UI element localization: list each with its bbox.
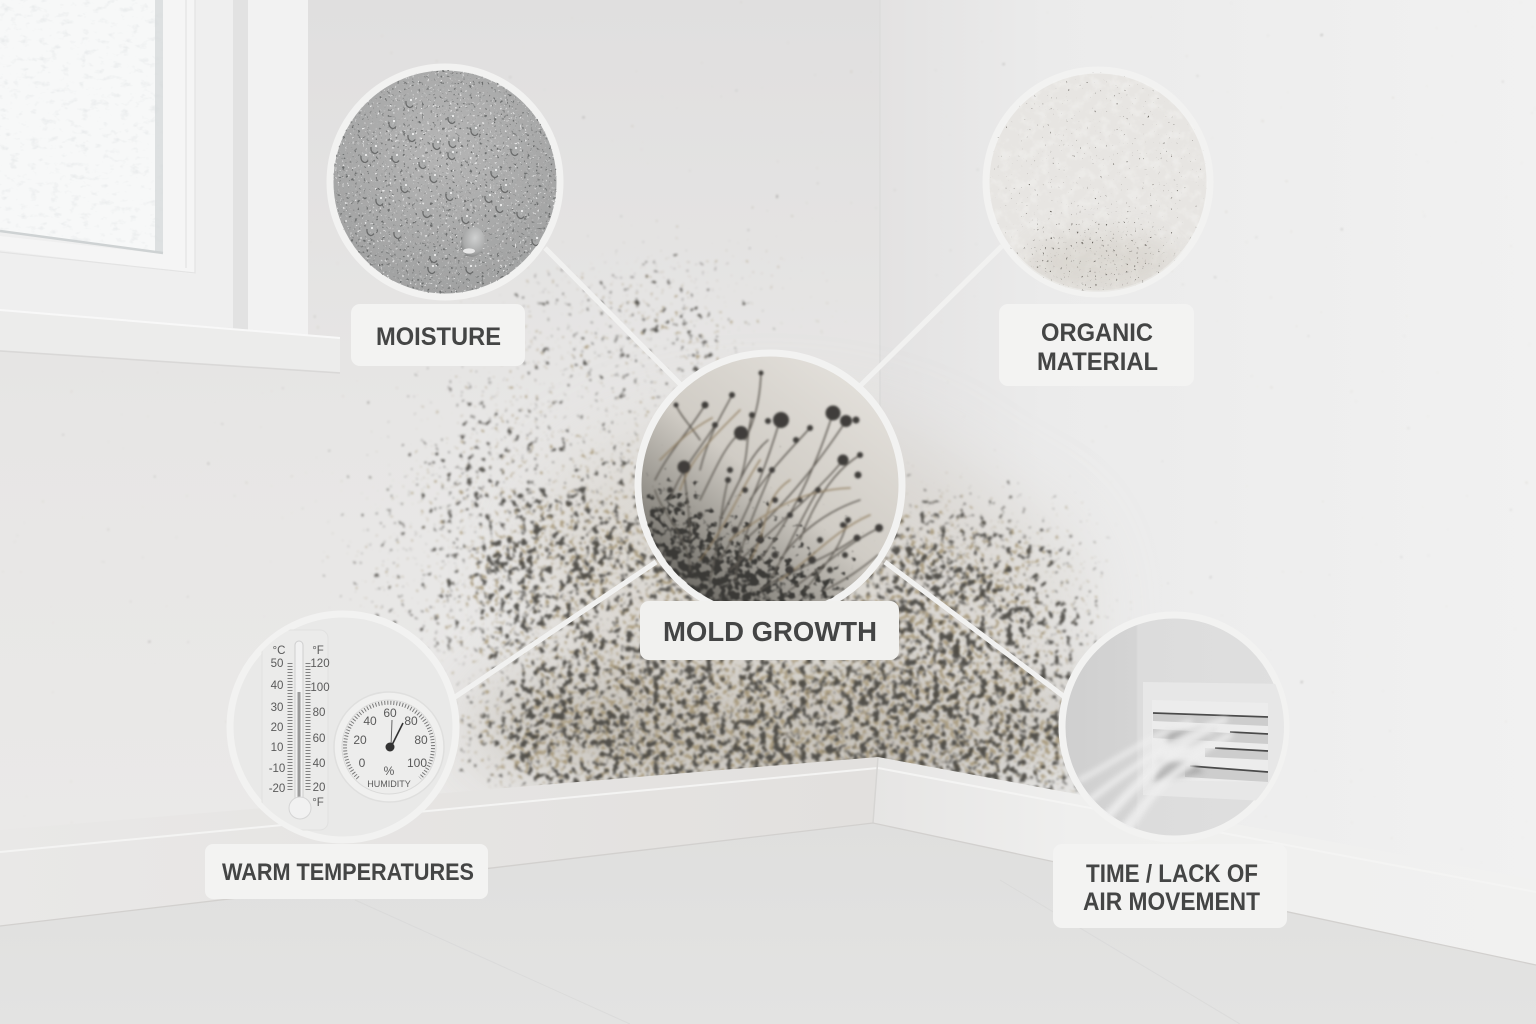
- label: time / lack of air movement: AIR MOVEMENT: [1083, 888, 1260, 916]
- humidity dial: 80: [404, 714, 418, 728]
- panel: mold growth: [630, 353, 902, 660]
- label: mold growth: [640, 601, 899, 660]
- window reveal shadow: [233, 0, 248, 330]
- circle: air vent background: [1062, 615, 1286, 839]
- thermometer: 20: [271, 722, 283, 734]
- thermometer: 20: [313, 782, 325, 794]
- thermometer: 60: [313, 733, 325, 745]
- mold stalks and spore heads: [646, 369, 884, 601]
- label: mold growth: MOLD GROWTH: [663, 616, 877, 647]
- humidity dial: 40: [363, 714, 377, 728]
- left wall: [0, 0, 880, 840]
- window: [0, 0, 340, 373]
- panel: organic material: [985, 68, 1211, 386]
- right wall: [880, 0, 1536, 890]
- humidity dial: [334, 692, 444, 802]
- window frame: [0, 0, 233, 328]
- panel: warm temperatures: [205, 614, 488, 899]
- label: organic material: MATERIAL: [1037, 348, 1158, 376]
- circle: warm temperatures background: [230, 614, 456, 840]
- label: warm temperatures: [205, 844, 488, 899]
- label: time / lack of air movement: TIME / LACK OF: [1086, 860, 1258, 888]
- thermometer: °C: [273, 645, 285, 657]
- connector: organic material to mold: [858, 246, 1002, 388]
- panel: moisture: [330, 67, 560, 366]
- circle: moisture ring: [330, 67, 560, 297]
- humidity dial: 20: [353, 733, 367, 747]
- connector: warm temperatures to mold: [455, 562, 656, 697]
- window sill: [0, 310, 340, 372]
- window trim: [248, 0, 308, 335]
- wall vent: [1143, 682, 1285, 802]
- dark speckles: [330, 220, 1130, 830]
- floor: [0, 823, 1536, 1024]
- thermometer: 40: [271, 680, 283, 692]
- label: organic material: [999, 304, 1194, 386]
- thermometer: °F: [312, 797, 324, 809]
- humidity dial: %: [384, 764, 395, 778]
- circle: organic material texture: [986, 70, 1210, 294]
- label: moisture: [351, 304, 525, 366]
- thermometer: °F: [312, 645, 324, 657]
- thermometer: 100: [310, 682, 330, 694]
- label: moisture: MOISTURE: [376, 323, 501, 351]
- panel: time / lack of air movement: [1053, 615, 1287, 928]
- stain tone: [470, 420, 1110, 785]
- connector: air movement to mold: [885, 562, 1066, 698]
- label: organic material: ORGANIC: [1041, 319, 1153, 347]
- label: time / lack of air movement: [1053, 844, 1287, 928]
- inner frame: [0, 0, 195, 274]
- thermometer: -10: [269, 763, 285, 775]
- humidity dial: 80: [414, 733, 428, 747]
- connector lines: [455, 246, 1066, 698]
- humidity dial: 60: [383, 706, 397, 720]
- thermometer: [262, 630, 330, 830]
- right baseboard: [873, 757, 1536, 965]
- thermometer: 80: [313, 707, 325, 719]
- water droplets: [330, 68, 560, 296]
- brown speckles: [330, 220, 1130, 830]
- humidity dial: 0: [359, 756, 366, 770]
- connector: moisture to mold: [545, 248, 682, 386]
- air flow wisps: [1080, 720, 1230, 835]
- humidity dial: 100: [407, 756, 427, 770]
- frosted glass: [0, 0, 163, 253]
- thermometer: 40: [313, 758, 325, 770]
- thermometer: -20: [269, 783, 285, 795]
- circle: mold close-up background: [638, 353, 902, 617]
- mold spread on wall: [330, 220, 1130, 830]
- speckled surface: [985, 68, 1211, 296]
- thermometer: 10: [271, 742, 283, 754]
- thermometer: 50: [271, 658, 283, 670]
- thermometer: 120: [310, 658, 330, 670]
- humidity dial: HUMIDITY: [367, 779, 411, 789]
- left baseboard: [0, 757, 878, 926]
- thermometer: 30: [271, 702, 283, 714]
- label: warm temperatures: WARM TEMPERATURES: [222, 859, 474, 886]
